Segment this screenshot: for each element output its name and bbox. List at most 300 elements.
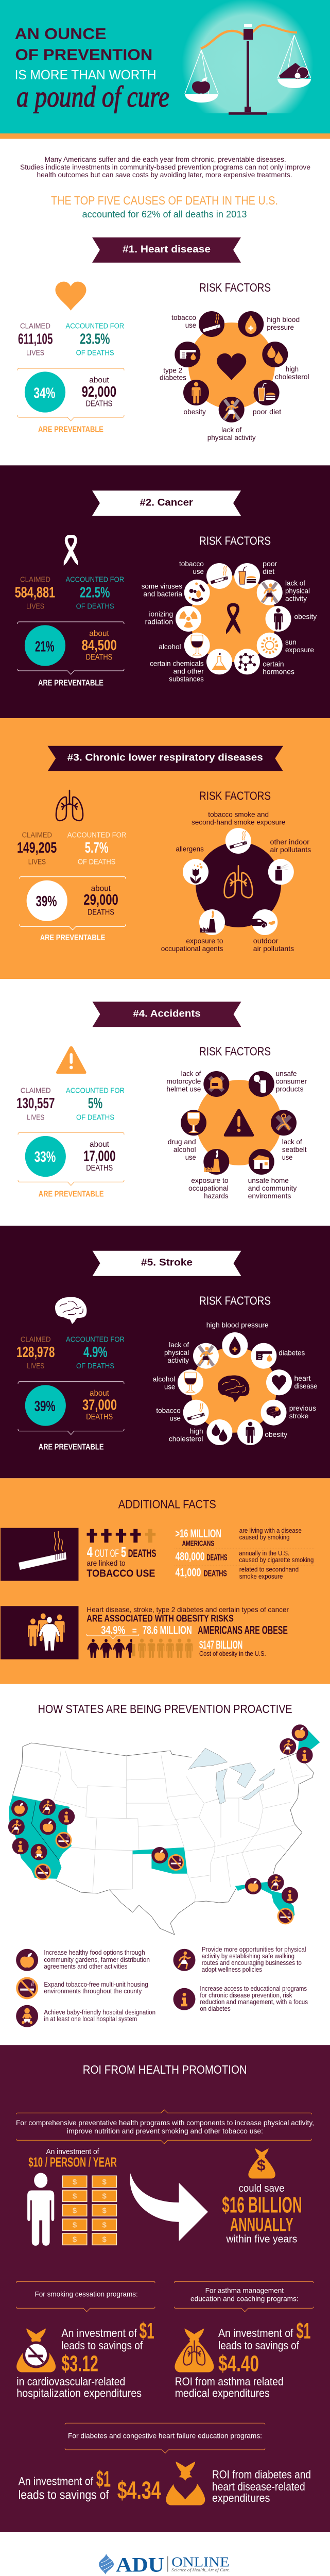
risk factor: occupational hazards: exposure to bbox=[191, 1176, 229, 1184]
stat: 41,000 deaths: 41,000 bbox=[175, 1566, 201, 1579]
stats: lives claimed and share of deaths: 128,978 bbox=[16, 1344, 55, 1361]
risk factor: outdoor air pollutants bbox=[252, 909, 294, 953]
panel: smoking cessation ROI: leads to savings of bbox=[61, 2339, 143, 2352]
stats: lives claimed and share of deaths: CLAIMED bbox=[20, 575, 50, 584]
legend item: physical activity: adopt wellness policies bbox=[202, 1965, 262, 1973]
risk factor: lack of seatbelt use: lack of bbox=[282, 1138, 302, 1146]
legend: state prevention strategies bbox=[16, 1945, 308, 2027]
savings: 16 billion annually: ANNUALLY bbox=[230, 2214, 293, 2235]
heading: risk factors: RISK FACTORS bbox=[199, 1045, 271, 1058]
text block: obesity risks: Heart disease, stroke, type 2 diabetes and certain types of cancer bbox=[86, 1605, 289, 1614]
risk factor: lack of physical activity: physical bbox=[285, 587, 310, 595]
risk factor: unsafe consumer products bbox=[249, 1069, 307, 1097]
legend item: educational programs: Increase access to educational programs bbox=[200, 1985, 307, 1992]
callout: preventable deaths: 29,000 bbox=[83, 892, 118, 908]
title: OF PREVENTION bbox=[15, 46, 152, 64]
risk factor: type 2 diabetes: diabetes bbox=[160, 374, 186, 382]
stat: four of five deaths linked to tobacco bbox=[86, 1529, 156, 1580]
heading: top five causes: accounted for 62% of all deaths in 2013 bbox=[82, 209, 247, 219]
risk factor: unsafe home and community environments: environments bbox=[248, 1192, 291, 1200]
risk factor: previous stroke: previous bbox=[289, 1404, 316, 1412]
callout: preventable deaths bbox=[18, 1382, 124, 1451]
heading: risk factors: RISK FACTORS bbox=[199, 534, 271, 547]
panel: diabetes and heart failure ROI bbox=[19, 2423, 311, 2505]
risk factor: high cholesterol: high bbox=[190, 1427, 203, 1435]
stat: 480,000 deaths: DEATHS bbox=[207, 1552, 228, 1562]
state: Oklahoma bbox=[133, 1848, 187, 1874]
stat: 41,000 deaths bbox=[175, 1566, 299, 1580]
investment per person: $ bbox=[102, 2206, 107, 2215]
risk factor: unsafe home and community environments: unsafe home bbox=[248, 1176, 289, 1184]
risk factor: occupational agents: occupational agents bbox=[161, 944, 223, 953]
risk factor: obesity: obesity bbox=[265, 1430, 287, 1438]
risk factor: poor diet bbox=[234, 560, 277, 589]
investment per person: $ bbox=[102, 2235, 107, 2244]
risk factor: tobacco use: use bbox=[193, 567, 204, 575]
banner: stroke: #5. Stroke bbox=[141, 1257, 193, 1268]
banner: respiratory diseases: #3. Chronic lower respiratory diseases bbox=[67, 752, 263, 764]
stats: lives claimed and share of deaths: ACCOUNTED FOR bbox=[66, 575, 124, 584]
stats: lives claimed and share of deaths: 5.7% bbox=[85, 840, 109, 856]
logo: ADU Online: ADU bbox=[116, 2553, 164, 2576]
investment per person: $ bbox=[102, 2178, 107, 2187]
stats: lives claimed and share of deaths: 130,557 bbox=[16, 1095, 55, 1112]
risk factor: high cholesterol bbox=[169, 1419, 232, 1445]
lakes bbox=[188, 1748, 275, 1804]
heading: risk factors: RISK FACTORS bbox=[199, 1294, 271, 1308]
panel: asthma management ROI: medical expenditures bbox=[175, 2386, 270, 2399]
risk factor: tobacco use: tobacco bbox=[171, 313, 196, 321]
risk factor: indoor air pollutants bbox=[268, 838, 311, 885]
arrow: curved white arrow bbox=[130, 2173, 208, 2241]
callout: preventable deaths: DEATHS bbox=[86, 399, 112, 408]
investment per person: $ bbox=[73, 2178, 77, 2187]
risk factor: tobacco smoke: tobacco smoke and bbox=[208, 810, 269, 819]
panel: asthma management ROI: $4.40 bbox=[218, 2351, 259, 2376]
panel: diabetes and heart failure ROI: heart disease-related bbox=[212, 2480, 305, 2493]
risk factor: indoor air pollutants: air pollutants bbox=[270, 845, 311, 854]
savings: 16 billion annually: within five years bbox=[226, 2234, 297, 2245]
risk factor: drug and alcohol use: drug and bbox=[168, 1138, 196, 1146]
banner: accidents: #4. Accidents bbox=[133, 1008, 201, 1019]
legend item: educational programs: reduction and management, with a focus bbox=[200, 1998, 308, 2006]
risk factor: alcohol use bbox=[153, 1369, 203, 1395]
intro paragraph: Many Americans suffer and die each year from chronic, preventable diseases. bbox=[45, 156, 286, 163]
banner: cancer bbox=[92, 490, 241, 516]
panel: obesity people icon bbox=[1, 1606, 78, 1659]
icon: heart bbox=[56, 282, 86, 311]
callout: preventable deaths: 33% bbox=[34, 1149, 56, 1165]
risk factor: diabetes bbox=[251, 1343, 305, 1369]
risk wheel: respiratory bbox=[161, 810, 311, 953]
investment per person: $ bbox=[102, 2192, 107, 2201]
stat: four of five deaths linked to tobacco: OUT OF bbox=[95, 1548, 119, 1560]
callout: preventable deaths: about bbox=[89, 629, 109, 638]
text block: obesity risks bbox=[86, 1605, 289, 1639]
risk factor: lack of physical activity bbox=[257, 579, 310, 605]
panel: asthma management ROI: An investment of bbox=[218, 2327, 293, 2340]
legend item: educational programs: on diabetes bbox=[200, 2005, 231, 2012]
risk factor: alcohol use: alcohol bbox=[153, 1375, 175, 1383]
risk factor: certain chemicals: certain chemicals bbox=[150, 659, 204, 668]
risk factor: high blood pressure: high blood pressure bbox=[206, 1321, 269, 1329]
callout: preventable deaths: 92,000 bbox=[82, 384, 116, 400]
risk factor: high blood pressure: high blood bbox=[267, 315, 300, 324]
stats: lives claimed and share of deaths: ACCOUNTED FOR bbox=[66, 1086, 125, 1095]
stats: lives claimed and share of deaths: ACCOUNTED FOR bbox=[66, 321, 124, 330]
callout: comprehensive programs: For comprehensive preventative health programs with components to increase physical activity, bbox=[16, 2119, 314, 2127]
risk factor: obesity: obesity bbox=[183, 408, 206, 416]
risk factor: certain hormones bbox=[234, 649, 294, 676]
risk factor: alcohol: alcohol bbox=[159, 642, 181, 651]
panel: smoking cessation ROI: $1 bbox=[140, 2318, 154, 2344]
banner: cancer: #2. Cancer bbox=[140, 497, 193, 509]
stat: 480,000 deaths: caused by cigarette smoking bbox=[239, 1556, 314, 1564]
panel: smoking cessation ROI: hospitalization expenditures bbox=[16, 2386, 142, 2399]
map markers bbox=[8, 1724, 313, 1924]
icon: brain bbox=[55, 1297, 86, 1324]
risk factor: occupational hazards bbox=[188, 1149, 229, 1200]
risk factor: lack of physical activity: lack of bbox=[169, 1341, 189, 1349]
stats: lives claimed and share of deaths: CLAIMED bbox=[21, 1086, 51, 1095]
risk factor: allergens: allergens bbox=[176, 845, 204, 853]
legend item: healthy food: agreements and other activities bbox=[44, 1962, 128, 1970]
risk factor: tobacco use: use bbox=[185, 321, 196, 329]
section: ROI from health promotion bbox=[0, 2045, 330, 2532]
risk factor: some viruses and bacteria: some viruses bbox=[142, 582, 182, 590]
risk factor: type 2 diabetes: type 2 bbox=[163, 366, 182, 374]
risk factor: certain hormones: certain bbox=[263, 660, 284, 668]
risk factor: high cholesterol: high bbox=[286, 365, 299, 373]
icon: stacks of bills bbox=[62, 2176, 116, 2245]
risk factor: lack of seatbelt use: use bbox=[282, 1153, 292, 1161]
title bbox=[15, 25, 169, 113]
risk factor: occupational agents bbox=[161, 909, 225, 953]
stat: more than 16 million Americans: are living with a disease bbox=[239, 1527, 302, 1534]
risk wheel: stroke bbox=[153, 1321, 318, 1445]
stat: four of five deaths linked to tobacco: TOBACCO USE bbox=[86, 1568, 155, 1580]
investment per person bbox=[27, 2147, 117, 2246]
risk factor: poor diet bbox=[253, 380, 281, 416]
icon: ribbon bbox=[64, 535, 78, 566]
stats: lives claimed and share of deaths bbox=[16, 1086, 125, 1122]
risk factor: some viruses and bacteria: and bacteria bbox=[143, 590, 182, 598]
risk factor: obesity bbox=[183, 380, 209, 416]
callout: comprehensive programs bbox=[16, 2110, 314, 2144]
stat: 480,000 deaths: annually in the U.S. bbox=[239, 1549, 289, 1557]
panel: diabetes and heart failure ROI: ROI from diabetes and bbox=[212, 2468, 311, 2481]
stats: lives claimed and share of deaths: OF DEATHS bbox=[76, 1113, 114, 1122]
stats: lives claimed and share of deaths: LIVES bbox=[27, 1362, 44, 1370]
investment per person: $ bbox=[73, 2192, 77, 2201]
investment per person: $10 / PERSON / YEAR bbox=[28, 2155, 117, 2170]
callout: preventable deaths: DEATHS bbox=[88, 908, 114, 917]
risk factor: high blood pressure bbox=[206, 1321, 269, 1358]
risk factor: lack of physical activity bbox=[207, 397, 256, 442]
risk wheel: heart disease bbox=[160, 311, 309, 442]
icon: money bag with no smoking bbox=[16, 2329, 56, 2372]
stats: lives claimed and share of deaths: CLAIMED bbox=[21, 1335, 51, 1344]
legend item: physical activity: routes and encouraging businesses to bbox=[202, 1959, 302, 1967]
callout: preventable deaths: 84,500 bbox=[82, 637, 117, 654]
stat: more than 16 million Americans bbox=[175, 1527, 302, 1548]
risk factor: indoor air pollutants: other indoor bbox=[270, 838, 309, 846]
panel: diabetes and heart failure ROI: expenditures bbox=[212, 2492, 270, 2504]
stat: cost of obesity: Cost of obesity in the U.S. bbox=[199, 1650, 266, 1657]
callout: preventable deaths: about bbox=[89, 376, 109, 384]
callout: preventable deaths: 39% bbox=[34, 1398, 56, 1415]
heading: additional facts: ADDITIONAL FACTS bbox=[118, 1497, 216, 1511]
risk factor: alcohol use: use bbox=[164, 1383, 175, 1391]
stat: four of five deaths linked to tobacco: 4 bbox=[87, 1544, 93, 1560]
investment per person: $ bbox=[73, 2235, 77, 2244]
risk factor: poor diet: poor diet bbox=[253, 408, 281, 416]
savings: 16 billion annually: $ bbox=[257, 2157, 266, 2174]
icon: money bag with heart bbox=[166, 2462, 205, 2505]
risk factor: sun exposure: sun bbox=[285, 638, 297, 646]
heading: how states are being prevention proactive: HOW STATES ARE BEING PREVENTION PROACTIVE bbox=[38, 1702, 292, 1716]
stats: lives claimed and share of deaths bbox=[16, 1335, 125, 1370]
risk factor: motorcycle helmet: helmet use bbox=[166, 1084, 201, 1093]
risk factor: tobacco use: use bbox=[170, 1414, 181, 1422]
pictogram: people row 34.9 percent bbox=[87, 1639, 193, 1658]
risk factor: outdoor air pollutants: air pollutants bbox=[253, 944, 294, 953]
risk factor: motorcycle helmet bbox=[166, 1069, 229, 1097]
stats: lives claimed and share of deaths: 23.5% bbox=[80, 331, 110, 348]
risk factor: certain hormones: hormones bbox=[263, 668, 294, 676]
stats: lives claimed and share of deaths: OF DEATHS bbox=[76, 348, 114, 357]
callout: preventable deaths: 39% bbox=[36, 893, 57, 910]
legend item: educational programs: for chronic disease prevention, risk bbox=[200, 1991, 292, 1999]
callout: preventable deaths: 21% bbox=[35, 638, 55, 655]
investment per person: $ bbox=[73, 2206, 77, 2215]
stats: lives claimed and share of deaths: LIVES bbox=[26, 602, 44, 611]
risk factor: lack of seatbelt use: seatbelt bbox=[282, 1145, 307, 1154]
stat: 41,000 deaths: DEATHS bbox=[204, 1568, 227, 1578]
risk factor: unsafe home and community environments bbox=[248, 1149, 297, 1200]
legend item: physical activity: activity by establishing safe walking bbox=[202, 1952, 294, 1960]
stats: lives claimed and share of deaths: LIVES bbox=[26, 348, 44, 357]
panel: diabetes and heart failure ROI: leads to savings of bbox=[19, 2488, 109, 2502]
heading: top five causes bbox=[51, 194, 278, 219]
legend item: tobacco-free housing: environments throughout the county bbox=[44, 1987, 142, 1995]
text block: obesity risks: 34.9% bbox=[101, 1624, 125, 1637]
stat: four of five deaths linked to tobacco: DEATHS bbox=[128, 1548, 156, 1560]
callout: preventable deaths bbox=[18, 1132, 124, 1198]
section: #3 chronic lower respiratory diseases bbox=[0, 718, 330, 979]
stats: lives claimed and share of deaths: LIVES bbox=[27, 1113, 44, 1122]
stats: lives claimed and share of deaths: OF DEATHS bbox=[76, 602, 114, 611]
risk factor: poor diet: diet bbox=[263, 567, 274, 575]
intro paragraph: Studies indicate investments in community-based prevention programs can not only improve bbox=[20, 163, 310, 171]
stat: more than 16 million Americans: caused by smoking bbox=[239, 1533, 289, 1541]
banner: accidents bbox=[93, 1002, 241, 1027]
risk factor: motorcycle helmet: lack of bbox=[181, 1069, 201, 1077]
callout: preventable deaths: ARE PREVENTABLE bbox=[39, 1443, 104, 1451]
savings: 16 billion annually bbox=[222, 2148, 302, 2245]
icon row: crosses bbox=[86, 1529, 155, 1543]
stat: cost of obesity bbox=[199, 1638, 266, 1657]
text block: obesity risks: 78.6 MILLION bbox=[143, 1624, 192, 1637]
risk factor: lack of physical activity: lack of bbox=[285, 579, 305, 587]
risk factor: certain chemicals: and other bbox=[173, 667, 204, 675]
stats: lives claimed and share of deaths bbox=[18, 321, 124, 357]
title: AN OUNCE bbox=[15, 25, 107, 43]
icon: money bag bbox=[248, 2148, 275, 2178]
logo: ADU Online: ONLINE bbox=[171, 2555, 230, 2570]
callout: preventable deaths: DEATHS bbox=[86, 1413, 113, 1421]
text block: obesity risks: = bbox=[132, 1626, 137, 1636]
risk factor: lack of seatbelt use bbox=[271, 1110, 307, 1161]
risk factor: tobacco use bbox=[156, 1400, 209, 1426]
callout: preventable deaths: ARE PREVENTABLE bbox=[38, 679, 103, 687]
risk factor: ionizing radiation: radiation bbox=[145, 618, 173, 626]
risk factor: unsafe consumer products: unsafe bbox=[276, 1069, 297, 1077]
investment per person: $ bbox=[102, 2221, 107, 2230]
risk factor: lack of physical activity: activity bbox=[167, 1356, 189, 1364]
stats: lives claimed and share of deaths: 4.9% bbox=[83, 1344, 108, 1361]
risk factor: occupational hazards: hazards bbox=[204, 1192, 229, 1200]
stat: four of five deaths linked to tobacco: 5 bbox=[121, 1544, 126, 1560]
risk factor: alcohol bbox=[159, 633, 210, 658]
panel: smoking cessation ROI: $3.12 bbox=[61, 2351, 98, 2376]
stats: lives claimed and share of deaths: 611,105 bbox=[18, 331, 53, 348]
risk factor: tobacco smoke bbox=[192, 810, 286, 854]
panel: diabetes and heart failure ROI: For diabetes and congestive heart failure education programs: bbox=[68, 2432, 262, 2440]
risk wheel: cancer bbox=[142, 560, 317, 683]
callout: preventable deaths bbox=[20, 877, 126, 942]
risk factor: high cholesterol: cholesterol bbox=[275, 372, 309, 381]
stats: lives claimed and share of deaths: CLAIMED bbox=[22, 831, 52, 839]
banner: respiratory diseases bbox=[47, 746, 283, 771]
legend item: baby-friendly hospitals: in at least one local hospital system bbox=[44, 2015, 137, 2023]
risk factor: unsafe consumer products: products bbox=[276, 1084, 304, 1093]
section: #2 cancer bbox=[0, 465, 330, 718]
panel: smoking cessation ROI: in cardiovascular-related bbox=[16, 2375, 125, 2388]
stat: cost of obesity: $147 BILLION bbox=[199, 1638, 242, 1651]
callout: preventable deaths: DEATHS bbox=[86, 1164, 113, 1173]
legend item: healthy food bbox=[16, 1948, 150, 1971]
icon: person bbox=[27, 2173, 54, 2246]
risk factor: obesity bbox=[237, 1419, 287, 1445]
callout: preventable deaths bbox=[18, 368, 124, 434]
legend item: healthy food: Increase healthy food options through bbox=[44, 1948, 145, 1956]
panel: asthma management ROI bbox=[174, 2281, 314, 2399]
risk factor: occupational hazards: occupational bbox=[188, 1184, 229, 1192]
risk factor: high cholesterol bbox=[262, 342, 309, 381]
risk factor: previous stroke bbox=[260, 1400, 316, 1426]
risk factor: drug and alcohol use: alcohol bbox=[173, 1145, 196, 1154]
risk factor: obesity: obesity bbox=[294, 613, 317, 621]
risk factor: tobacco smoke: second-hand smoke exposure bbox=[192, 818, 286, 826]
header banner bbox=[0, 0, 330, 139]
risk factor: unsafe home and community environments: and community bbox=[248, 1184, 297, 1192]
risk factor: type 2 diabetes bbox=[160, 342, 200, 382]
section: #1 heart disease bbox=[18, 238, 309, 442]
risk factor: sun exposure bbox=[257, 633, 314, 658]
risk factor: tobacco use: tobacco bbox=[156, 1406, 181, 1415]
investment per person: $ bbox=[73, 2221, 77, 2230]
callout: comprehensive programs: improve nutrition and prevent smoking and other tobacco use: bbox=[67, 2127, 263, 2135]
heading: risk factors: RISK FACTORS bbox=[199, 789, 271, 803]
intro paragraph bbox=[20, 156, 310, 179]
legend item: baby-friendly hospitals: Achieve baby-friendly hospital designation bbox=[44, 2008, 155, 2016]
risk factor: tobacco use bbox=[179, 560, 232, 589]
section: #4 accidents bbox=[16, 1002, 307, 1200]
icon: balance scale bbox=[185, 24, 311, 115]
icon: money bag with lungs bbox=[175, 2329, 214, 2372]
banner: stroke bbox=[93, 1251, 241, 1276]
panel: smoking cessation ROI bbox=[16, 2281, 155, 2399]
risk factor: ionizing radiation bbox=[145, 606, 201, 632]
risk factor: lack of physical activity: physical bbox=[164, 1348, 189, 1357]
stats: lives claimed and share of deaths: OF DEATHS bbox=[78, 857, 115, 866]
callout: preventable deaths: about bbox=[90, 1140, 110, 1149]
risk factor: diabetes: diabetes bbox=[279, 1349, 305, 1357]
title: a pound of cure bbox=[16, 80, 169, 113]
map: United States with highlighted states bbox=[8, 1724, 320, 1935]
stats: lives claimed and share of deaths bbox=[17, 831, 126, 866]
intro paragraph: health outcomes but can save costs by avoiding later, more expensive treatments. bbox=[37, 171, 292, 179]
risk factor: high cholesterol: cholesterol bbox=[169, 1435, 203, 1443]
legend item: physical activity bbox=[173, 1945, 306, 1973]
logo: ADU Online bbox=[99, 2553, 231, 2576]
stats: lives claimed and share of deaths: 584,881 bbox=[15, 585, 55, 601]
risk factor: lack of physical activity: physical activity bbox=[207, 433, 256, 442]
panel: asthma management ROI: $1 bbox=[297, 2318, 310, 2344]
callout: preventable deaths: ARE PREVENTABLE bbox=[40, 934, 105, 942]
title: IS MORE THAN WORTH bbox=[15, 67, 157, 82]
banner: heart disease: #1. Heart disease bbox=[123, 244, 211, 255]
risk factor: high blood pressure bbox=[238, 311, 300, 337]
legend item: physical activity: Provide more opportunities for physical bbox=[202, 1945, 306, 1953]
risk factor: high blood pressure: pressure bbox=[267, 323, 294, 331]
stats: lives claimed and share of deaths: OF DEATHS bbox=[76, 1362, 114, 1370]
stats: lives claimed and share of deaths: LIVES bbox=[28, 857, 46, 866]
icon: warning triangle bbox=[56, 1046, 86, 1074]
stat: four of five deaths linked to tobacco: are linked to bbox=[86, 1559, 126, 1568]
savings: 16 billion annually: could save bbox=[239, 2183, 285, 2194]
stats: lives claimed and share of deaths: 5% bbox=[88, 1095, 102, 1112]
callout: preventable deaths: ARE PREVENTABLE bbox=[39, 1190, 104, 1198]
stats: lives claimed and share of deaths: 22.5% bbox=[80, 585, 110, 601]
risk factor: lack of physical activity: activity bbox=[285, 595, 307, 603]
stat: 480,000 deaths bbox=[175, 1549, 314, 1564]
risk factor: tobacco use: tobacco bbox=[179, 560, 204, 568]
section: #5 stroke bbox=[0, 1226, 330, 1478]
risk factor: drug and alcohol use bbox=[168, 1110, 206, 1161]
stat: 41,000 deaths: related to secondhand bbox=[239, 1566, 299, 1573]
risk wheel: accidents bbox=[166, 1069, 307, 1200]
logo: ADU Online: Science of Health, Art of Care. bbox=[171, 2567, 231, 2572]
panel: asthma management ROI: leads to savings of bbox=[218, 2339, 300, 2352]
heading: risk factors: RISK FACTORS bbox=[199, 281, 271, 294]
stats: lives claimed and share of deaths: 149,205 bbox=[17, 840, 57, 856]
risk factor: occupational agents: exposure to bbox=[186, 937, 223, 945]
risk factor: poor diet: poor bbox=[263, 560, 277, 568]
callout: preventable deaths: DEATHS bbox=[86, 653, 112, 662]
callout: preventable deaths: 17,000 bbox=[83, 1148, 115, 1164]
state: Florida bbox=[235, 1882, 294, 1921]
risk factor: allergens bbox=[176, 845, 209, 885]
risk factor: tobacco use bbox=[171, 311, 224, 337]
stats: lives claimed and share of deaths: ACCOUNTED FOR bbox=[66, 1335, 125, 1344]
risk factor: ionizing radiation: ionizing bbox=[149, 610, 173, 618]
callout: preventable deaths bbox=[18, 622, 124, 687]
risk factor: heart disease: disease bbox=[294, 1382, 318, 1390]
legend item: baby-friendly hospitals bbox=[16, 2005, 155, 2027]
risk factor: unsafe consumer products: consumer bbox=[276, 1077, 307, 1085]
